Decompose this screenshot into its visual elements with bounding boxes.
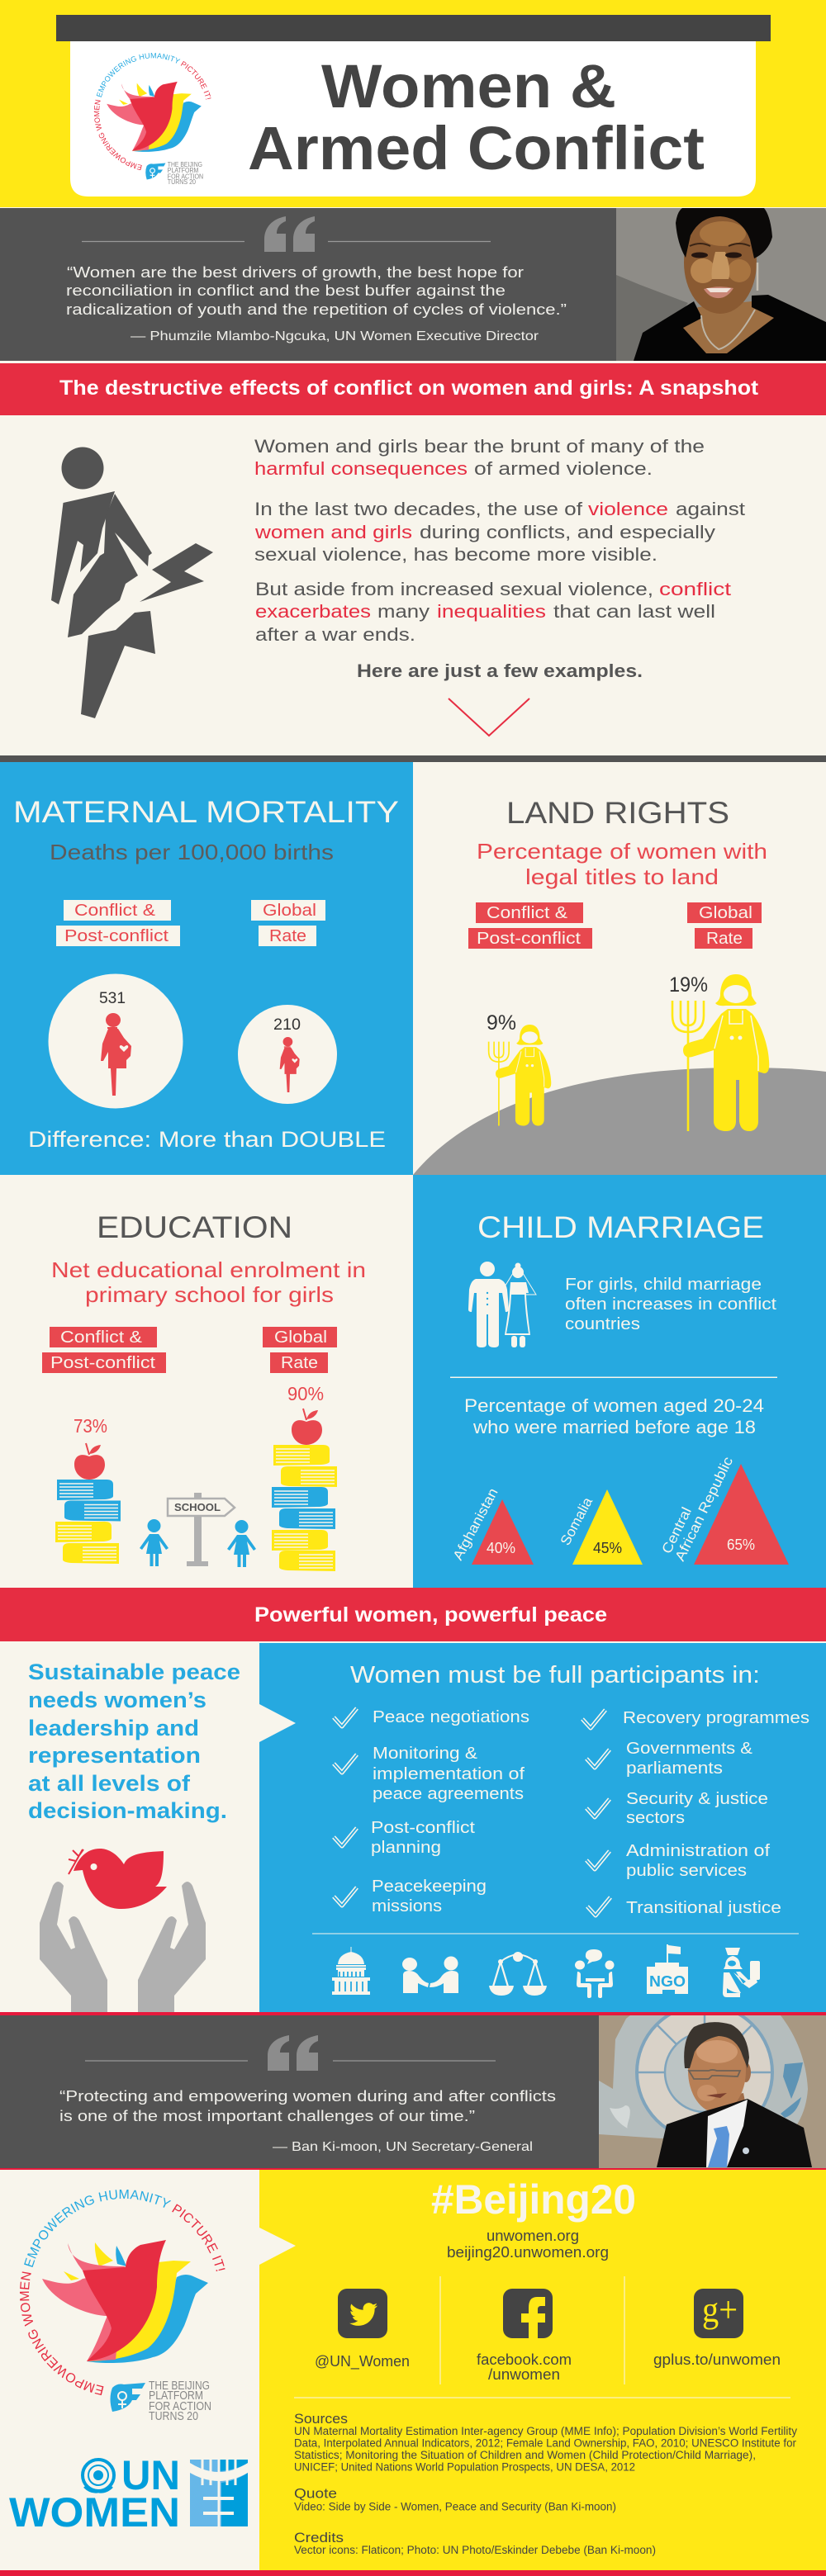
labels: Post-conflict — [50, 1354, 156, 1372]
text block: intro paragraphs: Women and girls bear the brunt of many of the — [254, 436, 705, 457]
checklist text: Security & justice — [626, 1790, 768, 1808]
icon: handshake — [402, 1957, 458, 1993]
chart: Somalia 45%: Somalia — [558, 1494, 596, 1548]
text: child marriage statement: countries — [565, 1315, 640, 1333]
quote text: “Protecting and empowering women during and after conflicts — [59, 2088, 556, 2105]
logo: Beijing 20: EMPOWERING WOMEN EMPOWERING HUMANITY PICTURE IT! — [94, 53, 211, 170]
links: unwomen.org — [487, 2228, 579, 2244]
logo: Beijing 20: TURNS 20 — [168, 178, 196, 186]
checklist text: sectors — [626, 1809, 685, 1827]
chart: Afghanistan 40%: 40% — [487, 1540, 515, 1556]
icon: school sign: SCHOOL — [174, 1501, 221, 1513]
text block: decision-making. — [28, 1798, 227, 1823]
checklist text: Peacekeeping — [372, 1878, 487, 1896]
checklist text: implementation of — [373, 1765, 525, 1783]
checklist text: Transitional justice — [626, 1899, 781, 1917]
hill — [413, 1068, 826, 1175]
quote text: radicalization of youth and the repetition of cycles of violence.” — [66, 301, 567, 318]
social: twitter — [315, 2289, 410, 2370]
banner: powerful women: Powerful women, powerful peace — [254, 1603, 607, 1627]
icon: couple — [468, 1262, 536, 1347]
dark top bar — [56, 15, 771, 41]
checklist text: Administration of — [626, 1842, 771, 1860]
text block: intro paragraphs: sexual violence, has become more visible. — [254, 544, 657, 565]
quote text: — Phumzile Mlambo-Ngcuka, UN Women Executive Director — [131, 329, 539, 343]
labels: Rate — [706, 930, 743, 948]
arrow: down chevron — [449, 698, 529, 736]
text block: intro paragraphs: against — [676, 499, 745, 519]
chart: Central African Republic 65%: 65% — [727, 1537, 755, 1553]
difference: Difference: More than DOUBLE — [28, 1127, 386, 1152]
checklist text — [371, 1708, 809, 1917]
text block: intro paragraphs: violence — [588, 499, 668, 519]
chart: conflict book stack 73%: 73% — [74, 1415, 107, 1437]
checklist text: missions — [372, 1897, 442, 1915]
checklist text: Monitoring & — [373, 1745, 478, 1763]
checklist text: peace agreements — [373, 1785, 524, 1803]
icon: scales — [489, 1952, 547, 1996]
text: child marriage statement: For girls, child marriage — [565, 1276, 762, 1294]
chart: large farmer 19%: 19% — [669, 973, 708, 997]
quote text: “Women are the best drivers of growth, the best hope for — [67, 264, 524, 281]
panel: child marriage — [413, 1175, 826, 1588]
title: Women & — [321, 52, 616, 121]
logo: Beijing 20 large: EMPOWERING WOMEN EMPOWERING HUMANITY PICTURE IT! — [20, 2190, 225, 2396]
text block: intro paragraphs: women and girls — [254, 522, 412, 542]
sources: Data, Interpolated Annual Indicators, 2012; Female Land Ownership, FAO, 2010; UNESCO Institute for — [294, 2437, 796, 2449]
labels: Rate — [269, 927, 306, 945]
subheading: Net educational enrolment in — [51, 1257, 366, 1282]
checklist text: parliaments — [626, 1759, 723, 1778]
text block: intro paragraphs: But aside from increased sexual violence, — [255, 579, 653, 599]
credits: Credits — [294, 2530, 344, 2545]
labels: Global — [263, 902, 316, 920]
heading: MATERNAL MORTALITY — [13, 795, 399, 829]
checklist icons — [334, 1708, 610, 1915]
logo: Beijing 20: THE BEIJING — [168, 160, 202, 168]
panel: education — [0, 1175, 413, 1588]
banner: snapshot heading — [0, 363, 826, 415]
portrait: Ban Ki-moon — [599, 2005, 826, 2168]
text block: representation — [28, 1743, 201, 1768]
chart: small farmer 9% — [487, 1011, 551, 1126]
text: percentage caption: who were married before age 18 — [472, 1417, 756, 1437]
checklist text: Recovery programmes — [623, 1709, 809, 1727]
labels — [42, 1327, 337, 1373]
credits — [294, 2530, 656, 2556]
title: Armed Conflict — [248, 114, 705, 182]
icon: capitol — [332, 1947, 370, 1995]
subheading — [51, 1257, 366, 1307]
quote source: Video: Side by Side - Women, Peace and Security (Ban Ki-moon) — [294, 2500, 616, 2513]
sources — [294, 2411, 797, 2474]
chart: large farmer 19% — [669, 973, 769, 1131]
quote panel: Ban Ki-moon — [0, 2005, 826, 2168]
text: child marriage statement — [565, 1276, 777, 1333]
icon: NGO building — [647, 1944, 688, 1994]
chart: Afghanistan 40% — [450, 1485, 534, 1565]
subheading: legal titles to land — [525, 864, 719, 889]
quote text — [59, 2088, 556, 2154]
panel: snapshot intro — [0, 415, 826, 755]
icon: child left — [140, 1519, 169, 1566]
text block: intro paragraphs: conflict — [659, 579, 731, 599]
quote mark — [264, 216, 315, 252]
labels: Rate — [281, 1354, 318, 1372]
labels: Post-conflict — [64, 927, 169, 945]
labels: Conflict & — [487, 904, 568, 922]
text block: intro paragraphs: during conflicts, and especially — [420, 522, 715, 542]
panel: full participants — [259, 1643, 826, 2012]
hashtag: #Beijing20 — [431, 2176, 636, 2223]
chart: Central African Republic 65% — [659, 1454, 789, 1565]
labels: Global — [699, 904, 752, 922]
icon: meeting — [575, 1949, 615, 1998]
text block: intro paragraphs: many — [377, 601, 430, 622]
sources: Statistics; Monitoring the Situation of Children and Women (Child Protection/Child Marriage), — [294, 2449, 756, 2461]
text: percentage caption — [464, 1395, 764, 1437]
social: facebook — [477, 2289, 572, 2383]
subheading: Percentage of women with — [477, 839, 767, 864]
panel: footer right — [259, 2170, 826, 2570]
chart: Central African Republic 65%: African Republic — [672, 1454, 736, 1564]
credits: Vector icons: Flaticon; Photo: UN Photo/Eskinder Debebe (Ban Ki-moon) — [294, 2544, 656, 2556]
icon: NGO building: NGO — [649, 1973, 686, 1990]
labels: Conflict & — [74, 902, 156, 920]
heading: Women must be full participants in: — [350, 1662, 760, 1688]
chart: small farmer 9%: 9% — [487, 1011, 516, 1035]
chart: conflict rate 531 — [48, 974, 183, 1108]
social: google plus: g+ — [702, 2290, 738, 2330]
checklist text: Post-conflict — [371, 1819, 475, 1837]
arrow notch — [259, 2228, 296, 2265]
labels — [56, 900, 325, 946]
panel: sustainable peace — [0, 1641, 259, 2013]
sources: UNICEF; United Nations World Population Prospects, UN DESA, 2012 — [294, 2460, 635, 2474]
links: beijing20.unwomen.org — [447, 2244, 609, 2261]
heading: LAND RIGHTS — [506, 796, 729, 830]
arrow notch — [259, 1704, 296, 1742]
text block: intro paragraphs: harmful consequences — [254, 458, 468, 479]
text block: intro paragraphs — [254, 436, 745, 681]
logo: Beijing 20 large: PLATFORM — [149, 2389, 203, 2403]
logo: Beijing 20: FOR ACTION — [168, 172, 203, 180]
text block: intro paragraphs: after a war ends. — [255, 624, 415, 645]
icon row — [332, 1944, 760, 1998]
text block: intro paragraphs: In the last two decades, the use of — [254, 499, 583, 519]
quote mark — [268, 2035, 318, 2071]
checklist text: Governments & — [626, 1740, 753, 1758]
quote text: reconciliation in conflict and the best buffer against the — [66, 282, 506, 299]
quote text — [66, 264, 567, 343]
chart: global book stack 90%: 90% — [287, 1383, 324, 1404]
text block — [28, 1660, 240, 1823]
heading: EDUCATION — [97, 1210, 292, 1244]
icon: school sign — [168, 1493, 235, 1566]
text block: intro paragraphs: exacerbates — [255, 601, 371, 622]
logo: Beijing 20 large: FOR ACTION — [149, 2399, 211, 2413]
checklist text: public services — [626, 1862, 747, 1880]
logo: Beijing 20 large: THE BEIJING — [149, 2379, 210, 2393]
logo: UN Women — [9, 2452, 248, 2536]
banner: powerful women — [0, 1588, 826, 1641]
heading: CHILD MARRIAGE — [477, 1210, 764, 1244]
labels: Conflict & — [60, 1328, 143, 1347]
icon: broken woman figure — [51, 447, 213, 718]
quote source: Quote — [294, 2485, 337, 2502]
text block: intro paragraphs: of armed violence. — [474, 458, 653, 479]
chart: global rate 210 — [238, 1005, 337, 1104]
chart: Afghanistan 40%: Afghanistan — [450, 1485, 501, 1563]
sources: UN Maternal Mortality Estimation Inter-agency Group (MME Info); Population Division’s World Fertility — [294, 2425, 797, 2437]
chart: Central African Republic 65%: Central — [659, 1504, 695, 1556]
text block: needs women’s — [28, 1688, 206, 1712]
logo: UN Women: WOMEN — [9, 2489, 180, 2536]
white title card — [70, 41, 756, 197]
labels — [468, 902, 762, 949]
social: google plus — [653, 2289, 781, 2368]
chart: global rate 210: 210 — [273, 1016, 301, 1034]
panel: maternal mortality — [0, 762, 413, 1175]
quote panel: Phumzile Mlambo-Ngcuka — [0, 208, 826, 361]
logo: Beijing 20 large: TURNS 20 — [149, 2409, 198, 2423]
quote text: — Ban Ki-moon, UN Secretary-General — [273, 2140, 533, 2154]
subheading — [477, 839, 767, 889]
logo: UN Women: UN — [121, 2452, 180, 2498]
text block: intro paragraphs: that can last well — [553, 601, 715, 622]
icon: hands — [40, 1882, 206, 2012]
social: facebook: /unwomen — [488, 2366, 560, 2383]
icon: nurse — [723, 1948, 760, 1997]
text block: leadership and — [28, 1716, 199, 1740]
icon: dove — [69, 1849, 167, 1909]
text: child marriage statement: often increases in conflict — [565, 1295, 777, 1314]
chart: Somalia 45%: 45% — [593, 1540, 622, 1556]
sources: Sources — [294, 2411, 348, 2427]
text block: Sustainable peace — [28, 1660, 240, 1684]
links — [447, 2228, 609, 2261]
labels: Post-conflict — [477, 930, 581, 948]
panel: footer left logos — [0, 2170, 259, 2536]
chart: global book stack 90% — [272, 1383, 337, 1571]
subheading: Deaths per 100,000 births — [50, 840, 334, 864]
text: percentage caption: Percentage of women aged 20-24 — [464, 1395, 764, 1416]
title — [248, 52, 705, 182]
checklist text: planning — [371, 1839, 441, 1857]
icon: child right — [227, 1520, 256, 1567]
panel: land rights — [413, 762, 826, 1175]
chart: Somalia 45% — [558, 1489, 643, 1565]
social: twitter: @UN_Women — [315, 2353, 410, 2370]
quote text: is one of the most important challenges of our time.” — [59, 2108, 475, 2124]
social: google plus: gplus.to/unwomen — [653, 2351, 781, 2368]
portrait: Phumzile Mlambo-Ngcuka — [616, 208, 826, 361]
text block: at all levels of — [28, 1771, 191, 1796]
chart: conflict book stack 73% — [55, 1415, 121, 1564]
header section — [0, 0, 826, 207]
quote source — [294, 2485, 616, 2513]
checklist text: Peace negotiations — [373, 1708, 529, 1726]
logo: Beijing 20: PLATFORM — [168, 166, 198, 174]
labels: Global — [274, 1328, 327, 1347]
social: facebook: facebook.com — [477, 2351, 572, 2368]
subheading: primary school for girls — [85, 1282, 334, 1307]
text block: intro paragraphs: inequalities — [437, 601, 546, 622]
text block: intro paragraphs: Here are just a few examples. — [357, 661, 643, 681]
chart: conflict rate 531: 531 — [99, 990, 126, 1007]
banner: snapshot heading: The destructive effects of conflict on women and girls: A snapshot — [59, 376, 759, 400]
